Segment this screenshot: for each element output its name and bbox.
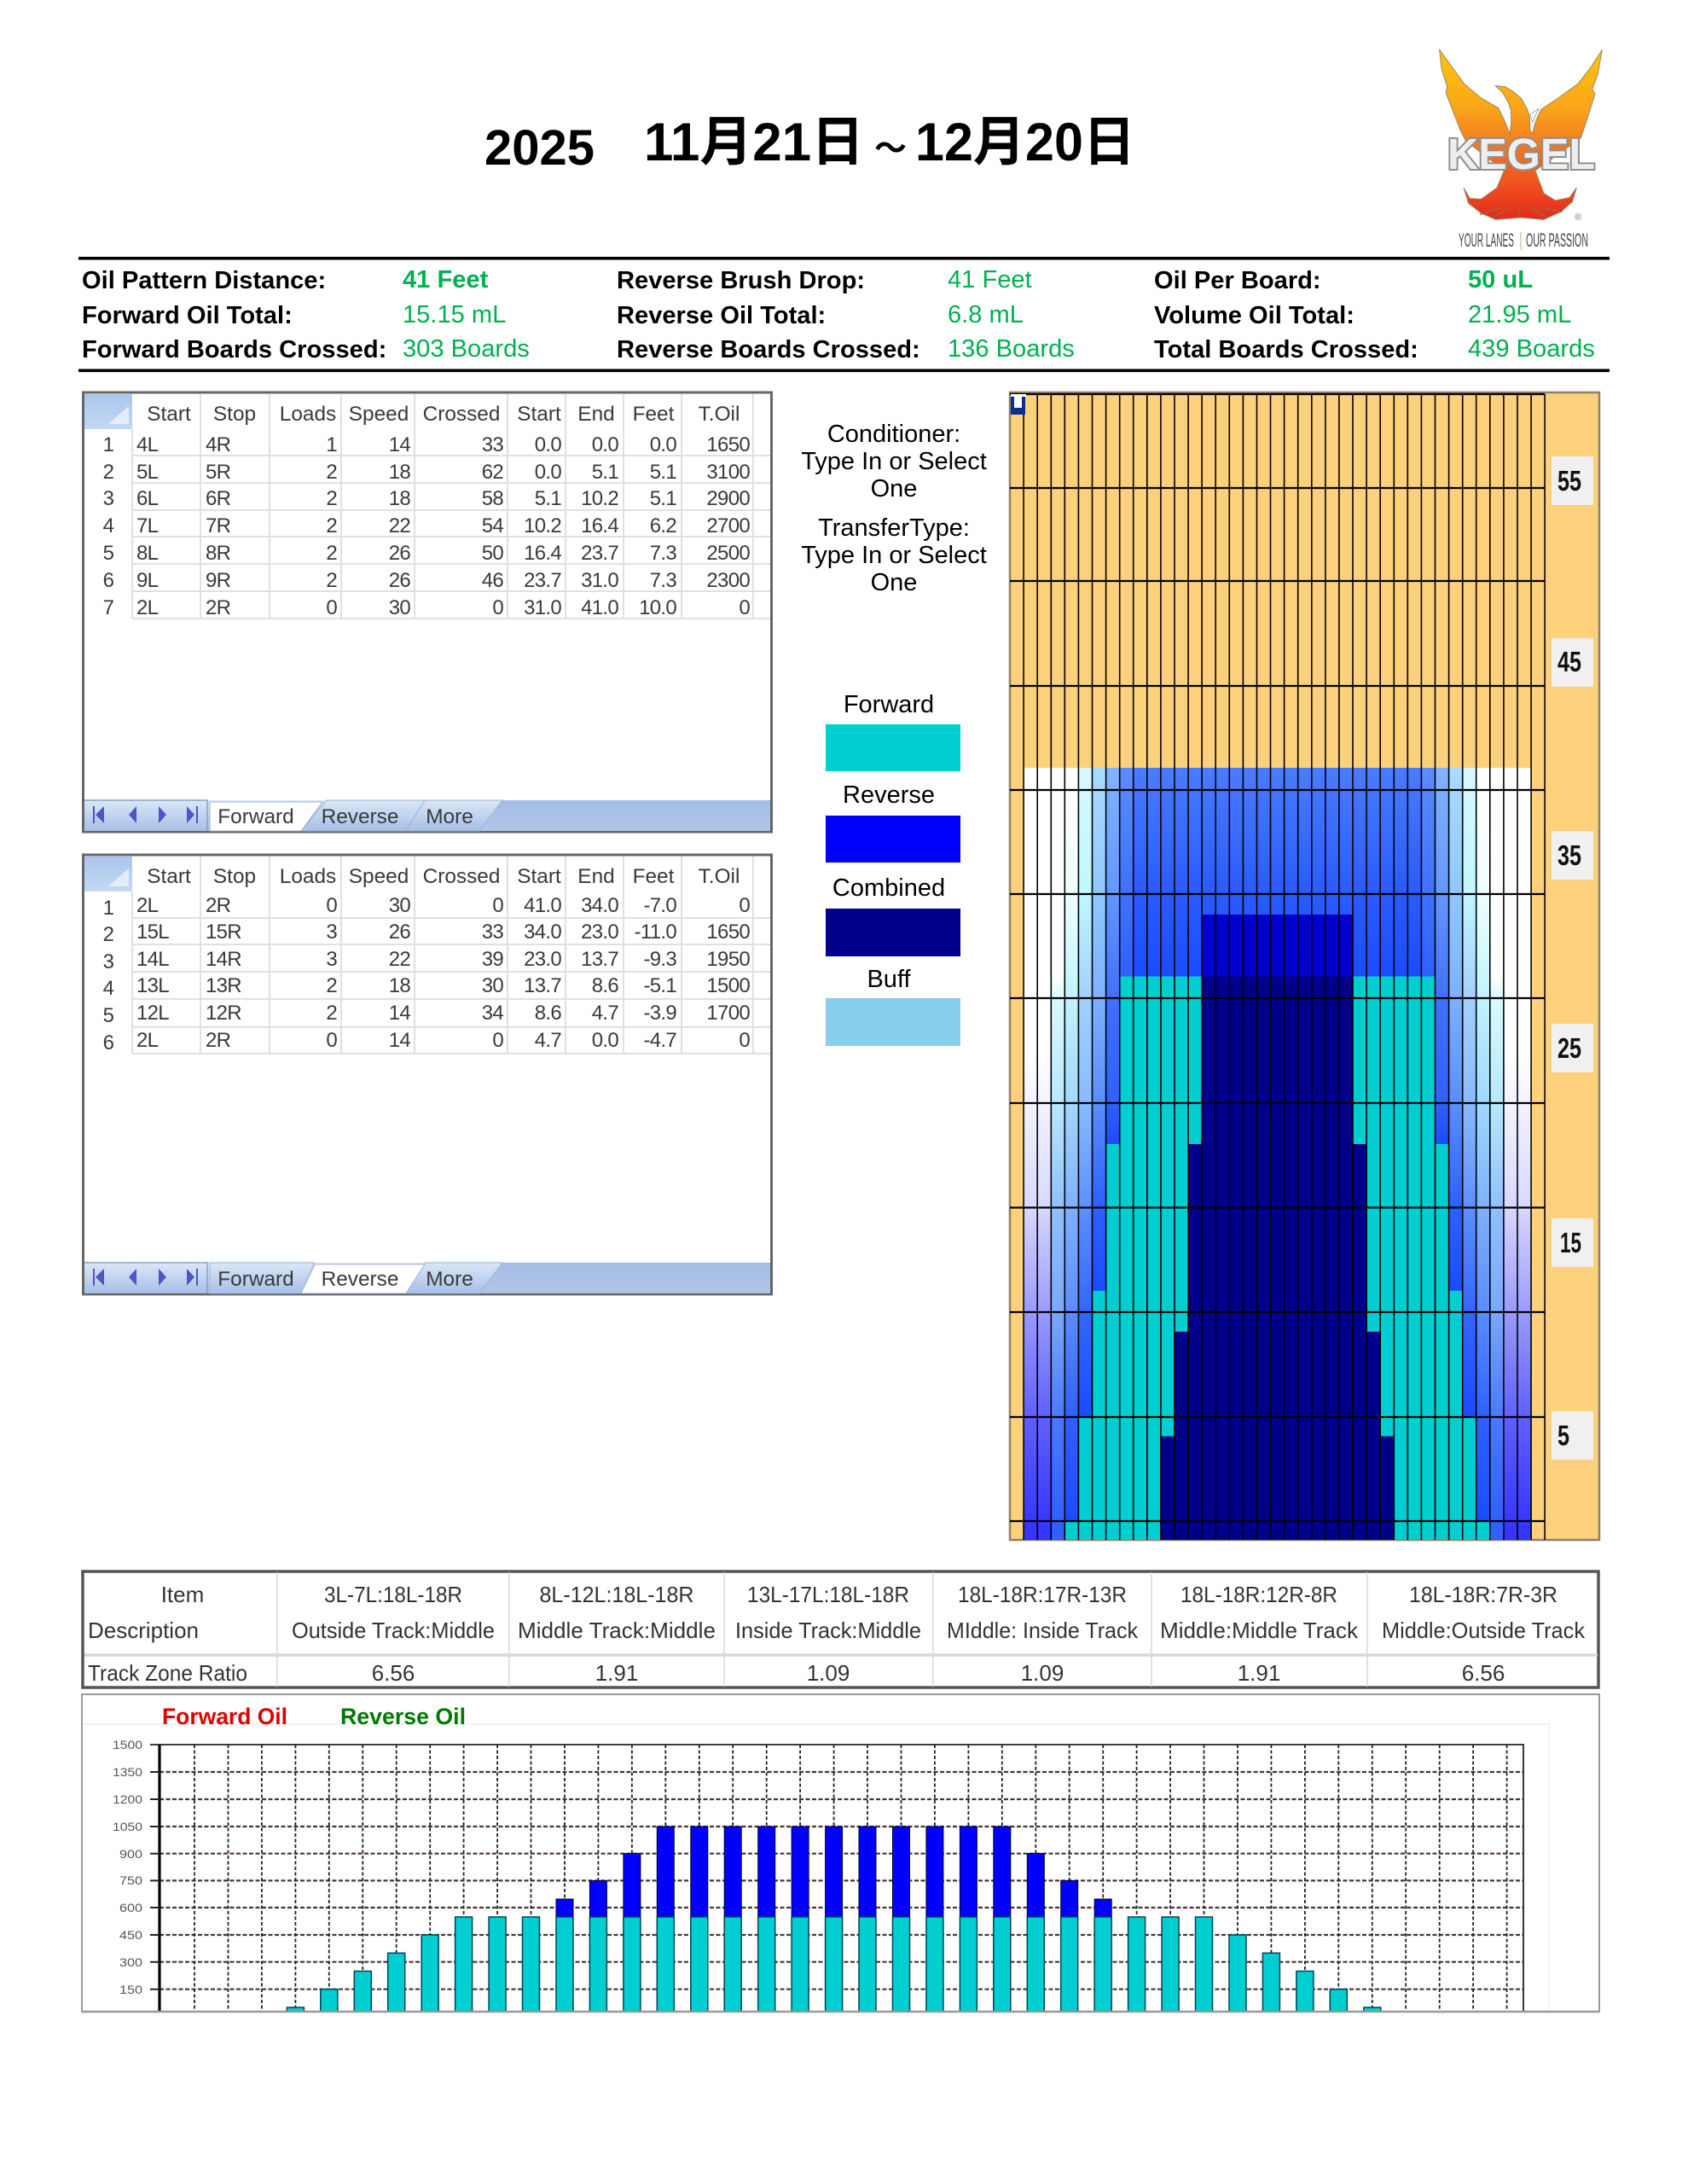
reverse table header: Feet xyxy=(633,865,675,888)
reverse table rows: 4 xyxy=(103,977,114,1000)
forward table rows: 9R xyxy=(206,569,231,592)
combined oil zone xyxy=(1161,976,1394,1540)
y-axis labels: 300 xyxy=(119,1955,142,1969)
logo: Kegel phoenix: ® xyxy=(1575,212,1581,223)
summary stats block: 21.95 mL xyxy=(1468,301,1571,328)
logo: Kegel phoenix: OUR PASSION xyxy=(1526,229,1588,251)
reverse table header: Crossed xyxy=(423,865,500,888)
reverse table rows: -11.0 xyxy=(635,921,676,944)
reverse table header: Loads xyxy=(280,865,336,888)
description row: Middle Track:Middle xyxy=(518,1618,716,1643)
forward table rows: 31.0 xyxy=(581,569,618,592)
y-axis labels: 1050 xyxy=(113,1820,142,1833)
forward table rows: 6R xyxy=(206,487,231,510)
forward table rows: 1 xyxy=(103,433,114,456)
forward table rows: 0 xyxy=(492,596,503,619)
forward table rows: 9L xyxy=(136,569,159,592)
reverse table rows: 3 xyxy=(326,921,337,944)
item row: Item xyxy=(161,1582,204,1607)
reverse table rows: 2R xyxy=(206,894,231,917)
header rule bottom xyxy=(78,369,1610,372)
forward table rows: 22 xyxy=(389,514,410,537)
reverse table rows: 2 xyxy=(103,923,114,946)
reverse table rows: 13R xyxy=(206,974,241,997)
y-axis labels xyxy=(113,1738,142,1996)
forward table rows: 5L xyxy=(136,461,159,484)
reverse table rows: 15R xyxy=(206,921,241,944)
forward table rows: 5.1 xyxy=(650,487,676,510)
forward table header: Speed xyxy=(349,403,409,426)
chart legend: reverse oil: Reverse Oil xyxy=(340,1704,466,1729)
reverse table rows: 13.7 xyxy=(581,948,618,971)
reverse table rows: 26 xyxy=(389,921,410,944)
selector marker xyxy=(1011,394,1026,415)
forward table rows: 2 xyxy=(326,542,337,565)
reverse table rows xyxy=(103,894,750,1054)
summary stats block: Forward Boards Crossed: xyxy=(82,336,386,363)
forward table rows: 2500 xyxy=(706,542,750,565)
distance labels: 45 xyxy=(1557,646,1581,677)
reverse table rows: 4.7 xyxy=(535,1029,561,1052)
ratio row xyxy=(88,1660,1505,1686)
panel: reverse table xyxy=(84,855,771,1294)
legend: buff: Buff xyxy=(867,966,911,993)
forward table header: Loads xyxy=(280,403,336,426)
reverse table rows: 39 xyxy=(482,948,503,971)
forward table rows: 14 xyxy=(389,433,410,456)
reverse table tab strip: Reverse xyxy=(322,1268,398,1291)
y-axis labels: 1200 xyxy=(113,1792,142,1806)
forward table rows: 50 xyxy=(482,542,503,565)
distance labels: 5 xyxy=(1557,1420,1569,1451)
y-axis labels: 450 xyxy=(119,1928,142,1942)
reverse table rows: 1700 xyxy=(706,1002,750,1025)
header rule top xyxy=(78,257,1610,260)
forward table header: Start xyxy=(147,403,191,426)
reverse table rows: -4.7 xyxy=(643,1029,676,1052)
forward table rows: 5R xyxy=(206,461,231,484)
reverse table rows: 0 xyxy=(326,894,337,917)
description row: MIddle: Inside Track xyxy=(947,1618,1139,1643)
logo: Kegel phoenix xyxy=(1440,49,1602,251)
reverse table rows: 41.0 xyxy=(524,894,561,917)
y-axis labels: 900 xyxy=(119,1847,142,1861)
forward oil zone xyxy=(1064,976,1490,1540)
forward table rows: 4R xyxy=(206,433,231,456)
forward table header xyxy=(147,403,740,426)
ratio row: 1.91 xyxy=(1238,1660,1280,1686)
reverse table rows: 0 xyxy=(492,894,503,917)
reverse table header: Stop xyxy=(213,865,256,888)
logo: Kegel phoenix: KEGEL xyxy=(1447,130,1595,178)
reverse table header: Speed xyxy=(349,865,409,888)
forward table rows: 7.3 xyxy=(650,569,676,592)
title: date range: 12月20日 xyxy=(915,113,1135,172)
description row xyxy=(88,1618,1586,1643)
forward table rows: 2 xyxy=(326,514,337,537)
forward table header: Start xyxy=(517,403,561,426)
text block: transfer type xyxy=(801,514,987,596)
summary stats block: 41 Feet xyxy=(948,266,1032,293)
text block: transfer type: One xyxy=(871,569,917,596)
forward table rows: 2900 xyxy=(706,487,750,510)
item row: 3L-7L:18L-18R xyxy=(324,1582,462,1607)
description row: Description xyxy=(88,1618,199,1643)
forward table rows: 46 xyxy=(482,569,503,592)
reverse table rows: 33 xyxy=(482,921,503,944)
forward table rows: 8L xyxy=(136,542,159,565)
item row xyxy=(161,1582,1557,1607)
summary stats block: Total Boards Crossed: xyxy=(1154,336,1418,363)
reverse table rows: 8.6 xyxy=(592,974,618,997)
forward table rows: 3 xyxy=(103,487,114,510)
reverse table header: Start xyxy=(517,865,561,888)
y-axis labels: 1350 xyxy=(113,1765,142,1779)
forward table rows: 58 xyxy=(482,487,503,510)
forward table rows: 4L xyxy=(136,433,159,456)
forward table rows: 7L xyxy=(136,514,159,537)
reverse table rows: -7.0 xyxy=(643,894,676,917)
y-axis labels: 750 xyxy=(119,1873,142,1887)
reverse table rows: 23.0 xyxy=(581,921,618,944)
reverse table rows: 4.7 xyxy=(592,1002,618,1025)
reverse table rows: 12R xyxy=(206,1002,241,1025)
reverse table rows: 13.7 xyxy=(524,974,561,997)
forward table rows: 2 xyxy=(103,461,114,484)
forward table rows: 0 xyxy=(326,596,337,619)
reverse table rows: 1500 xyxy=(706,974,750,997)
reverse table rows: 22 xyxy=(389,948,410,971)
forward table rows: 5.1 xyxy=(535,487,561,510)
legend: buff xyxy=(826,966,960,1046)
summary stats block: 50 uL xyxy=(1468,266,1533,293)
reverse table rows: 13L xyxy=(136,974,169,997)
reverse table rows: 2L xyxy=(136,1029,159,1052)
chart legend: forward oil: Forward Oil xyxy=(162,1704,287,1729)
distance labels: 25 xyxy=(1557,1032,1581,1064)
forward table rows: 2300 xyxy=(706,569,750,592)
forward table header: Feet xyxy=(633,403,675,426)
reverse table rows: 0 xyxy=(739,1029,750,1052)
legend: combined: Combined xyxy=(832,874,945,902)
title: date range: ～ xyxy=(874,131,907,167)
reverse table header xyxy=(147,865,740,888)
forward table header: Stop xyxy=(213,403,256,426)
reverse table rows: -3.9 xyxy=(643,1002,676,1025)
reverse table tab strip: More xyxy=(426,1268,473,1291)
forward table rows: 5.1 xyxy=(592,461,618,484)
reverse table rows: 0 xyxy=(492,1029,503,1052)
forward table rows: 31.0 xyxy=(524,596,561,619)
reverse table rows: 2 xyxy=(326,974,337,997)
reverse table rows: 0.0 xyxy=(592,1029,618,1052)
forward table rows: 2R xyxy=(206,596,231,619)
forward table rows: 1 xyxy=(326,433,337,456)
panel: lane oil graph xyxy=(1010,392,1599,1540)
legend: forward: Forward xyxy=(844,691,934,718)
forward table rows: 0.0 xyxy=(650,433,676,456)
summary stats block: 136 Boards xyxy=(948,335,1075,363)
reverse table rows: 0 xyxy=(326,1029,337,1052)
forward table rows: 3100 xyxy=(706,461,750,484)
summary stats block: 41 Feet xyxy=(403,266,489,293)
forward table rows: 5 xyxy=(103,542,114,565)
ratio row: 6.56 xyxy=(372,1660,415,1686)
forward table rows: 0.0 xyxy=(535,433,561,456)
panel: oil bar chart xyxy=(82,1694,1599,2012)
forward table rows: 8R xyxy=(206,542,231,565)
forward table rows: 5.1 xyxy=(650,461,676,484)
reverse table rows: 2 xyxy=(326,1002,337,1025)
ratio row: Track Zone Ratio xyxy=(88,1660,247,1686)
summary stats block: Reverse Oil Total: xyxy=(617,302,826,329)
item row: 18L-18R:7R-3R xyxy=(1409,1582,1557,1607)
text block: conditioner: Type In or Select xyxy=(801,448,987,475)
forward table rows: 6.2 xyxy=(650,514,676,537)
reverse table rows: 34 xyxy=(482,1002,503,1025)
item row: 13L-17L:18L-18R xyxy=(747,1582,909,1607)
forward table rows: 7R xyxy=(206,514,231,537)
forward table rows: 6 xyxy=(103,569,114,592)
reverse table rows: 1950 xyxy=(706,948,750,971)
forward table rows: 6L xyxy=(136,487,159,510)
forward table rows: 7 xyxy=(103,596,114,619)
text block: conditioner xyxy=(801,421,987,502)
forward table rows: 16.4 xyxy=(524,542,561,565)
forward table rows: 18 xyxy=(389,487,410,510)
forward table rows: 2L xyxy=(136,596,159,619)
y-axis labels: 600 xyxy=(119,1901,142,1914)
summary stats block: 15.15 mL xyxy=(403,301,506,328)
forward table rows: 0 xyxy=(739,596,750,619)
reverse table tab strip: Forward xyxy=(218,1268,294,1291)
y-axis labels: 1500 xyxy=(113,1738,142,1751)
legend: combined xyxy=(826,874,960,956)
reverse table rows: 14 xyxy=(389,1002,410,1025)
reverse table rows: 14L xyxy=(136,948,169,971)
reverse table rows: 3 xyxy=(326,948,337,971)
forward table rows: 7.3 xyxy=(650,542,676,565)
reverse table rows: 2R xyxy=(206,1029,231,1052)
forward table header: Crossed xyxy=(423,403,500,426)
summary stats block: Forward Oil Total: xyxy=(82,302,293,329)
reverse table rows: 18 xyxy=(389,974,410,997)
legend: reverse: Reverse xyxy=(843,781,935,809)
reverse table header: End xyxy=(577,865,615,888)
reverse table rows: 3 xyxy=(103,950,114,973)
text block: transfer type: Type In or Select xyxy=(801,542,987,569)
forward table rows: 10.2 xyxy=(581,487,618,510)
forward table rows: 18 xyxy=(389,461,410,484)
summary stats block: Reverse Brush Drop: xyxy=(617,267,865,294)
reverse table rows: 30 xyxy=(389,894,410,917)
reverse table rows: 12L xyxy=(136,1002,169,1025)
reverse table rows: 30 xyxy=(482,974,503,997)
reverse table rows: 1650 xyxy=(706,921,750,944)
reverse table rows: 6 xyxy=(103,1031,114,1054)
item row: 8L-12L:18L-18R xyxy=(539,1582,694,1607)
forward table tab strip: Forward xyxy=(218,805,294,828)
description row: Inside Track:Middle xyxy=(735,1618,921,1643)
legend: forward xyxy=(826,691,960,771)
text block: transfer type: TransferType: xyxy=(818,514,970,542)
reverse table rows: 23.0 xyxy=(524,948,561,971)
title: year: 2025 xyxy=(484,120,595,176)
panel: track zone ratio table xyxy=(83,1571,1598,1687)
text block: conditioner: One xyxy=(871,475,917,502)
description row: Middle:Outside Track xyxy=(1382,1618,1586,1643)
reverse table rows: 34.0 xyxy=(524,921,561,944)
description row: Middle:Middle Track xyxy=(1160,1618,1359,1643)
forward table rows: 23.7 xyxy=(581,542,618,565)
forward table rows: 30 xyxy=(389,596,410,619)
reverse table rows: 2L xyxy=(136,894,159,917)
ratio row: 1.09 xyxy=(807,1660,850,1686)
reverse table rows: 15L xyxy=(136,921,169,944)
title: date range: 11月21日 xyxy=(644,113,864,172)
reverse overlap top zone xyxy=(1202,915,1353,977)
y-axis labels: 150 xyxy=(119,1983,142,1996)
summary stats block: 303 Boards xyxy=(403,335,530,363)
forward table rows xyxy=(103,433,750,619)
reverse table tab strip xyxy=(84,1263,770,1293)
forward table rows: 1650 xyxy=(706,433,750,456)
reverse table rows: 14 xyxy=(389,1029,410,1052)
forward table header: T.Oil xyxy=(699,403,740,426)
reverse table rows: 0 xyxy=(739,894,750,917)
forward table header: End xyxy=(577,403,615,426)
forward table rows: 62 xyxy=(482,461,503,484)
summary stats block: Volume Oil Total: xyxy=(1154,302,1354,329)
text block: conditioner: Conditioner: xyxy=(827,421,960,448)
distance labels xyxy=(1552,456,1593,1460)
title: date range xyxy=(644,113,1135,172)
item row: 18L-18R:12R-8R xyxy=(1180,1582,1337,1607)
forward table rows: 41.0 xyxy=(581,596,618,619)
reverse table rows: 34.0 xyxy=(581,894,618,917)
forward table rows: 0.0 xyxy=(535,461,561,484)
reverse table header: T.Oil xyxy=(699,865,740,888)
ratio row: 1.09 xyxy=(1021,1660,1064,1686)
distance labels: 15 xyxy=(1560,1227,1581,1258)
forward table rows: 4 xyxy=(103,514,114,537)
forward table rows: 2700 xyxy=(706,514,750,537)
forward table rows: 33 xyxy=(482,433,503,456)
legend: reverse xyxy=(826,781,960,863)
summary stats block: Oil Pattern Distance: xyxy=(82,267,326,294)
forward table rows: 2 xyxy=(326,569,337,592)
reverse table rows: -9.3 xyxy=(643,948,676,971)
distance labels: 35 xyxy=(1557,839,1581,871)
legend xyxy=(826,691,960,1046)
ratio row: 1.91 xyxy=(595,1660,638,1686)
summary stats block: Oil Per Board: xyxy=(1154,267,1321,294)
forward table rows: 2 xyxy=(326,461,337,484)
forward table rows: 26 xyxy=(389,569,410,592)
reverse table rows: 8.6 xyxy=(535,1002,561,1025)
reverse table rows: 1 xyxy=(103,897,114,920)
summary stats block: Reverse Boards Crossed: xyxy=(617,336,920,363)
forward table tab strip: Reverse xyxy=(322,805,398,828)
item row: 18L-18R:17R-13R xyxy=(958,1582,1127,1607)
summary stats block xyxy=(82,266,1595,363)
reverse oil bars xyxy=(556,1827,1111,1917)
forward table rows: 23.7 xyxy=(524,569,561,592)
reverse table rows: 5 xyxy=(103,1004,114,1027)
panel: forward table xyxy=(84,392,771,832)
reverse table rows: 14R xyxy=(206,948,241,971)
forward oil bars xyxy=(287,1917,1381,2012)
description row: Outside Track:Middle xyxy=(292,1618,495,1643)
reverse table header: Start xyxy=(147,865,191,888)
ratio row: 6.56 xyxy=(1462,1660,1505,1686)
forward table rows: 26 xyxy=(389,542,410,565)
forward table rows: 16.4 xyxy=(581,514,618,537)
forward table tab strip: More xyxy=(426,805,473,828)
forward table rows: 10.2 xyxy=(524,514,561,537)
forward table rows: 2 xyxy=(326,487,337,510)
forward table rows: 54 xyxy=(482,514,503,537)
forward table rows: 0.0 xyxy=(592,433,618,456)
oil gradient columns xyxy=(1024,768,1531,1540)
distance labels: 55 xyxy=(1557,465,1581,497)
forward table tab strip xyxy=(84,800,770,831)
reverse table rows: -5.1 xyxy=(643,974,676,997)
forward table rows: 10.0 xyxy=(639,596,676,619)
summary stats block: 439 Boards xyxy=(1468,335,1595,363)
summary stats block: 6.8 mL xyxy=(948,301,1024,328)
logo: Kegel phoenix: YOUR LANES xyxy=(1459,229,1514,251)
